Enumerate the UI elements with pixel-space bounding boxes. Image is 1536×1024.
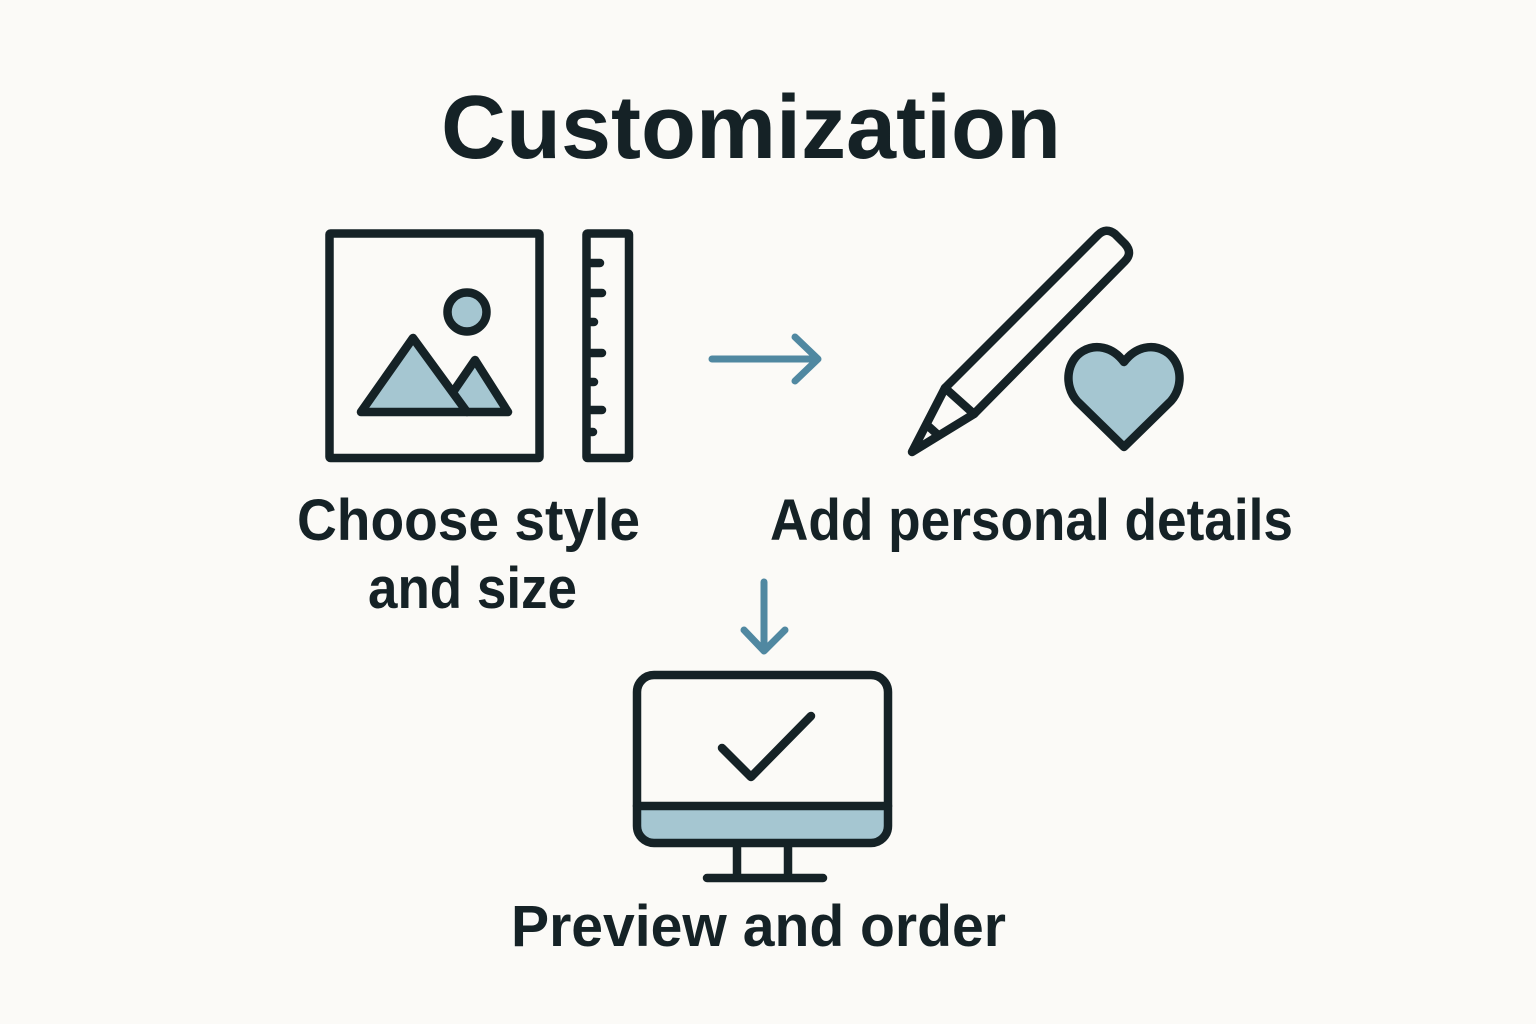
title: Customization bbox=[441, 78, 1061, 178]
label: add personal details: Add personal details bbox=[770, 488, 1293, 553]
icon: ruler bbox=[586, 234, 629, 458]
arrow: step 1 to step 2 bbox=[712, 337, 818, 381]
arrow: step 2 to step 3 bbox=[744, 582, 785, 651]
label: preview and order: Preview and order bbox=[511, 894, 1006, 959]
icon: monitor with check mark bbox=[637, 675, 888, 878]
step 2: add personal details bbox=[770, 231, 1293, 553]
label: choose style and size: Choose style bbox=[297, 488, 640, 553]
icon: heart bbox=[1068, 347, 1180, 447]
label: choose style and size bbox=[297, 488, 640, 621]
step 3: preview and order bbox=[511, 675, 1006, 959]
icon: picture frame with mountains and sun bbox=[330, 234, 540, 458]
label: choose style and size: and size bbox=[368, 556, 577, 621]
step 1: choose style and size bbox=[297, 234, 640, 621]
icon: pencil bbox=[912, 231, 1129, 452]
